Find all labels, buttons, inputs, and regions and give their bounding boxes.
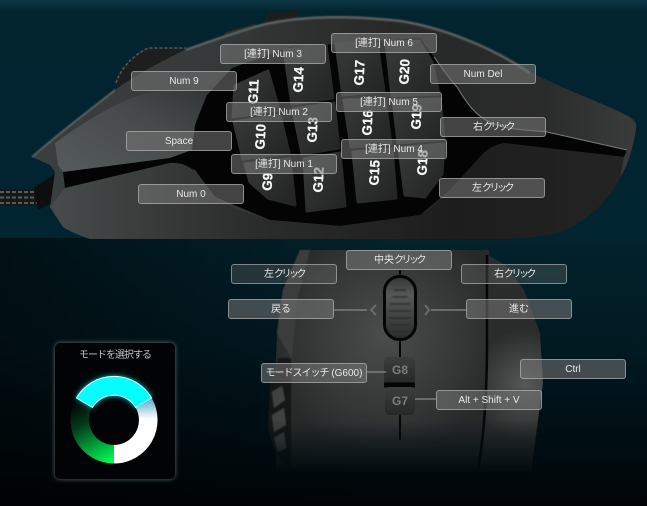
scroll wheel	[384, 276, 416, 340]
label middle click	[346, 250, 452, 270]
body edge	[290, 355, 294, 480]
label right click top view: 右クリック	[494, 269, 534, 280]
key labels: G16	[359, 109, 376, 136]
label back	[228, 299, 334, 319]
key labels: G13	[304, 116, 321, 143]
thumb keys	[233, 41, 444, 211]
label Num 6	[331, 33, 437, 53]
scroll wheel	[113, 48, 187, 90]
key labels: G18	[414, 149, 431, 176]
label Num Del	[430, 64, 536, 84]
key labels	[245, 59, 431, 193]
panel: mode selector	[55, 343, 175, 479]
label left click top view	[231, 264, 337, 284]
lower shell	[50, 143, 624, 239]
label Num 9: Num 9	[169, 76, 199, 87]
panel title: モードを選択する	[79, 350, 151, 361]
G8 button	[384, 357, 415, 384]
label Num 1: [連打] Num 1	[255, 159, 313, 170]
label mode switch: モードスイッチ (G600)	[266, 368, 362, 379]
label Num 6: [連打] Num 6	[355, 38, 413, 49]
tail flap highlight	[32, 90, 115, 157]
label Num 9	[131, 71, 237, 91]
label mode switch	[261, 363, 367, 383]
seam highlight	[434, 57, 627, 150]
label Num 4: [連打] Num 4	[365, 144, 423, 155]
label Num 5: [連打] Num 5	[360, 97, 418, 108]
label Num 0	[138, 184, 244, 204]
center line	[399, 270, 401, 440]
tilt arrows	[371, 305, 429, 315]
key labels: G11	[245, 79, 262, 105]
key labels: G19	[408, 104, 425, 130]
label forward: 進む	[509, 304, 529, 315]
white segment	[114, 398, 158, 464]
main body	[276, 250, 489, 480]
side view mouse	[0, 10, 636, 239]
key labels: G12	[310, 167, 327, 193]
label left click top view: 左クリック	[264, 269, 304, 280]
label right click: 右クリック	[473, 122, 513, 133]
label Num 1	[231, 154, 337, 174]
cyan glow	[76, 376, 152, 408]
key labels: G14	[290, 66, 307, 93]
G7 button: G7	[392, 394, 408, 408]
label left click: 左クリック	[472, 183, 512, 194]
side thumb keys	[268, 358, 292, 452]
right lobe	[482, 256, 543, 463]
label Num 5	[336, 92, 442, 112]
label Num 0: Num 0	[176, 189, 206, 200]
label right click	[440, 117, 546, 137]
cable	[0, 170, 65, 210]
label back: 戻る	[271, 304, 291, 315]
leader lines	[334, 310, 466, 399]
cyan selected segment	[76, 376, 152, 408]
label Ctrl	[520, 359, 626, 379]
label forward	[466, 299, 572, 319]
label Num Del: Num Del	[464, 69, 502, 80]
key labels: G20	[396, 59, 413, 85]
label left click	[439, 178, 545, 198]
wheel teeth	[116, 48, 186, 83]
left edge strip	[277, 250, 310, 360]
right button groove	[478, 255, 487, 470]
key labels: G10	[252, 124, 269, 150]
shell rim highlight	[186, 17, 530, 73]
label Num 3	[220, 44, 326, 64]
label Num 4	[341, 139, 447, 159]
G8 button: G8	[392, 363, 408, 377]
label Space	[126, 131, 232, 151]
upper shell	[32, 16, 636, 239]
label Alt Shift V	[436, 390, 542, 410]
label Space: Space	[165, 136, 193, 147]
key labels: G15	[366, 159, 383, 186]
label Alt Shift V: Alt + Shift + V	[458, 395, 520, 406]
key labels: G17	[351, 60, 368, 86]
label Num 3: [連打] Num 3	[244, 49, 302, 60]
label middle click: 中央クリック	[374, 255, 424, 266]
label right click top view	[461, 264, 567, 284]
label Ctrl: Ctrl	[565, 364, 581, 375]
green segment	[70, 398, 114, 464]
key labels: G9	[260, 172, 275, 191]
black well and seam	[63, 38, 627, 226]
label Num 2: [連打] Num 2	[250, 107, 308, 118]
G7 button	[385, 387, 415, 415]
tail panel	[55, 84, 212, 172]
top view mouse	[268, 250, 543, 480]
label Num 2	[226, 102, 332, 122]
mode ring	[70, 372, 158, 464]
top buttons	[222, 24, 258, 38]
